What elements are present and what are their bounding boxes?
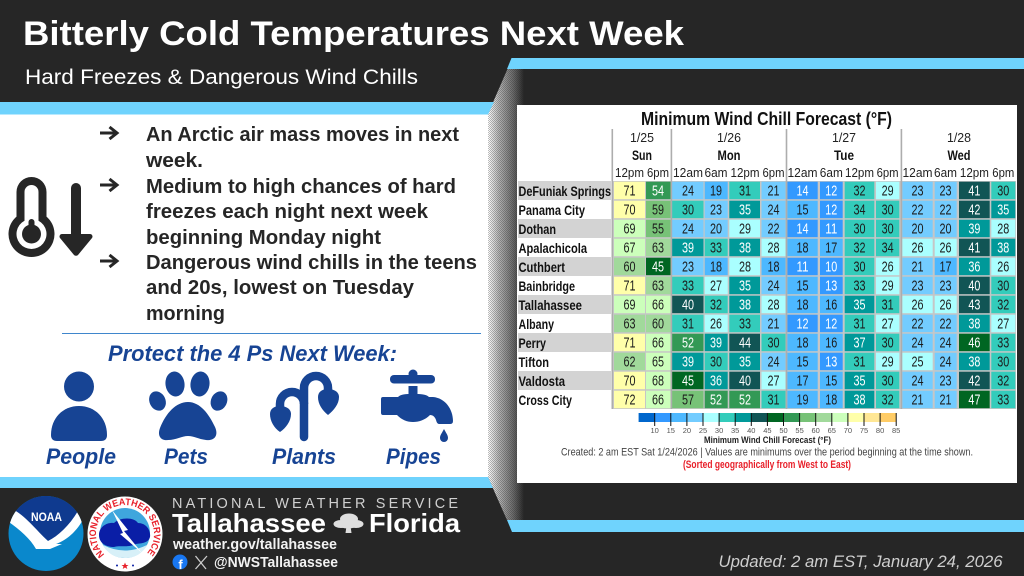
row: Panama City: 22 — [940, 202, 952, 218]
date and day headers: 1/26 — [717, 130, 741, 145]
legend: colour bar: 80 — [876, 426, 884, 435]
row: Cross City: 31 — [768, 393, 780, 409]
legend: colour bar: 15 — [667, 426, 675, 435]
row: Valdosta: 30 — [882, 374, 894, 390]
legend: colour bar: 35 — [731, 426, 739, 435]
label: people: People — [46, 444, 116, 469]
row: Cuthbert: 10 — [825, 260, 837, 276]
bullet text 1 — [145, 124, 459, 172]
row: DeFuniak Springs: 21 — [768, 183, 780, 199]
row: Bainbridge: 40 — [968, 279, 980, 295]
row: Dothan: 22 — [768, 221, 780, 237]
row: Tallahassee: 66 — [652, 298, 664, 314]
row: Tifton: 62 — [624, 355, 636, 371]
row: Panama City: 35 — [739, 202, 751, 218]
row: Apalachicola: 28 — [768, 240, 780, 256]
row: Apalachicola: 39 — [682, 240, 694, 256]
row: Cuthbert: 30 — [854, 260, 866, 276]
row: Cuthbert: 60 — [624, 260, 636, 276]
station names: Albany — [518, 317, 554, 332]
row: Perry: 33 — [997, 336, 1009, 352]
row: Dothan: 30 — [882, 221, 894, 237]
row: Panama City: 24 — [768, 202, 780, 218]
station names: Apalachicola — [518, 241, 587, 256]
legend: colour bar — [639, 413, 900, 435]
row: Dothan: 20 — [912, 221, 924, 237]
row: Panama City: 30 — [882, 202, 894, 218]
row: Bainbridge: 71 — [624, 279, 636, 295]
row: Perry — [614, 334, 1015, 352]
row: Dothan: 20 — [940, 221, 952, 237]
row: Albany: 22 — [912, 317, 924, 333]
row: Perry: 71 — [624, 336, 636, 352]
panel: wind chill chart — [517, 105, 1017, 483]
date and day headers: 1/25 — [630, 130, 654, 145]
footer: social handle: @NWSTallahassee — [214, 555, 338, 571]
row: Cuthbert: 23 — [682, 260, 694, 276]
row: Tallahassee: 38 — [739, 298, 751, 314]
row: DeFuniak Springs: 19 — [710, 183, 722, 199]
station names: Panama City — [518, 203, 585, 218]
row: Albany: 60 — [652, 317, 664, 333]
row: DeFuniak Springs: 23 — [912, 183, 924, 199]
row: Bainbridge: 23 — [940, 279, 952, 295]
icon: pipes — [381, 370, 453, 442]
row: Valdosta: 32 — [997, 374, 1009, 390]
updated timestamp: Updated: 2 am EST, January 24, 2026 — [718, 553, 1003, 571]
date and day headers: Tue — [834, 148, 854, 163]
sort note: (Sorted geographically from West to East) — [683, 459, 851, 471]
row: Apalachicola: 17 — [825, 240, 837, 256]
row: Tallahassee: 32 — [997, 298, 1009, 314]
row: Tallahassee: 43 — [968, 298, 980, 314]
row: Apalachicola: 34 — [882, 240, 894, 256]
row: DeFuniak Springs: 32 — [854, 183, 866, 199]
row: Bainbridge: 29 — [882, 279, 894, 295]
row: Panama City: 30 — [682, 202, 694, 218]
row: Tifton: 15 — [796, 355, 808, 371]
row: Tallahassee: 40 — [682, 298, 694, 314]
bullet text 3 — [146, 252, 477, 325]
row: Dothan: 14 — [796, 221, 808, 237]
accent band: under header — [0, 102, 494, 114]
row: Dothan — [614, 220, 1015, 238]
footer: website: weather.gov/tallahassee — [172, 537, 337, 553]
row: Tifton: 30 — [997, 355, 1009, 371]
row: Panama City: 35 — [997, 202, 1009, 218]
row: Panama City: 34 — [854, 202, 866, 218]
row: Cuthbert: 36 — [968, 260, 980, 276]
time headers: 6pm — [992, 165, 1014, 180]
station names: Cross City — [518, 393, 572, 408]
legend: colour bar: 70 — [844, 426, 852, 435]
row: Tallahassee: 26 — [912, 298, 924, 314]
chart title: Minimum Wind Chill Forecast (°F) — [641, 108, 892, 129]
row: Perry: 18 — [796, 336, 808, 352]
row: Panama City: 59 — [652, 202, 664, 218]
row: DeFuniak Springs: 24 — [682, 183, 694, 199]
row: Dothan: 30 — [854, 221, 866, 237]
icon: facebook — [172, 554, 188, 572]
row: Valdosta: 24 — [912, 374, 924, 390]
row: Perry: 66 — [652, 336, 664, 352]
legend: colour bar: 30 — [715, 426, 723, 435]
row: Valdosta: 45 — [682, 374, 694, 390]
row: Perry: 16 — [825, 336, 837, 352]
legend: colour bar: 75 — [860, 426, 868, 435]
bullet text 1: An Arctic air mass moves in next — [146, 124, 459, 146]
row: Dothan: 28 — [997, 221, 1009, 237]
icon: pets — [146, 370, 230, 440]
date and day headers: 1/28 — [947, 130, 971, 145]
logo: NOAA: NOAA — [31, 512, 62, 524]
time headers: 12am — [902, 165, 932, 180]
row: Tifton: 65 — [652, 355, 664, 371]
label: pets: Pets — [164, 444, 208, 469]
row: Apalachicola: 32 — [854, 240, 866, 256]
row: DeFuniak Springs: 54 — [652, 183, 664, 199]
row: DeFuniak Springs: 29 — [882, 183, 894, 199]
row: Bainbridge: 24 — [768, 279, 780, 295]
row: Cuthbert: 21 — [912, 260, 924, 276]
row: Bainbridge: 33 — [854, 279, 866, 295]
station names — [518, 184, 611, 408]
row: Cuthbert: 26 — [882, 260, 894, 276]
legend: colour bar: 20 — [683, 426, 691, 435]
row: Apalachicola: 18 — [796, 240, 808, 256]
bullet text 2: freezes each night next week — [146, 201, 429, 223]
row: Apalachicola: 26 — [912, 240, 924, 256]
row: Tallahassee: 32 — [710, 298, 722, 314]
time headers: 6am — [934, 165, 957, 180]
row: Albany: 31 — [682, 317, 694, 333]
row: Tallahassee: 31 — [882, 298, 894, 314]
date and day headers: Wed — [948, 148, 970, 163]
row: DeFuniak Springs — [614, 182, 1015, 200]
time headers: 12pm — [845, 165, 874, 180]
row: Cuthbert: 17 — [940, 260, 952, 276]
row: Dothan: 24 — [682, 221, 694, 237]
station names: Dothan — [518, 222, 556, 237]
bullet arrow 2 — [100, 179, 117, 191]
station names: Tifton — [518, 355, 549, 370]
row: Cuthbert: 18 — [710, 260, 722, 276]
date and day headers — [630, 130, 971, 163]
row: Panama City: 70 — [624, 202, 636, 218]
legend: colour bar: 45 — [763, 426, 772, 435]
row: Albany: 22 — [940, 317, 952, 333]
row: Cross City: 52 — [739, 393, 751, 409]
heading: protect the 4 Ps: Protect the 4 Ps Next Week: — [108, 341, 397, 366]
row: Cuthbert: 11 — [796, 260, 808, 276]
row: Tifton: 24 — [768, 355, 780, 371]
station names: Bainbridge — [518, 279, 575, 294]
row: Valdosta: 40 — [739, 374, 751, 390]
row: Cross City: 38 — [854, 393, 866, 409]
legend: colour bar: 60 — [812, 426, 820, 435]
row: Cross City — [614, 391, 1015, 408]
row: Valdosta: 23 — [940, 374, 952, 390]
row: Cross City: 72 — [624, 393, 636, 409]
legend: colour bar: 50 — [779, 426, 788, 435]
row: Panama City: 22 — [912, 202, 924, 218]
row: Bainbridge: 33 — [682, 279, 694, 295]
row: Perry: 30 — [882, 336, 894, 352]
row: Cross City: 21 — [940, 393, 952, 409]
row: Perry: 24 — [940, 336, 952, 352]
time headers: 12am — [788, 165, 818, 180]
row: DeFuniak Springs: 31 — [739, 183, 751, 199]
row: Apalachicola: 33 — [710, 240, 722, 256]
row: Cuthbert: 18 — [768, 260, 780, 276]
row: Cross City: 47 — [968, 393, 980, 409]
row: Panama City: 42 — [968, 202, 980, 218]
bullet arrow 1 — [100, 127, 117, 139]
table background — [612, 181, 1016, 409]
row: Bainbridge: 35 — [739, 279, 751, 295]
time headers: 12pm — [730, 165, 760, 180]
icon: facebook: f — [178, 557, 183, 572]
row: Apalachicola: 26 — [940, 240, 952, 256]
station names: Tallahassee — [518, 298, 582, 313]
row: Tifton: 13 — [825, 355, 837, 371]
row: Valdosta: 42 — [968, 374, 980, 390]
icon: thermometer — [9, 177, 55, 257]
row: Apalachicola: 41 — [968, 240, 980, 256]
row: Cross City: 33 — [997, 393, 1009, 409]
label: plants: Plants — [272, 444, 336, 469]
row: Dothan: 11 — [825, 221, 837, 237]
bullet text 1: week. — [145, 150, 203, 172]
time headers: 6pm — [647, 165, 669, 180]
row: Apalachicola: 38 — [997, 240, 1009, 256]
row: Apalachicola — [614, 239, 1015, 256]
bullet text 3: Dangerous wind chills in the teens — [146, 252, 477, 274]
bullet text 3: and 20s, lowest on Tuesday — [146, 277, 415, 299]
logo: National Weather Service: NATIONAL WEATHER SERVICE — [89, 498, 161, 558]
row: Cuthbert — [614, 258, 1015, 276]
row: Valdosta: 70 — [624, 374, 636, 390]
row: Tifton — [614, 353, 1015, 370]
icon: X — [196, 556, 207, 569]
legend title: Minimum Wind Chill Forecast (°F) — [704, 435, 831, 445]
row: Valdosta: 35 — [854, 374, 866, 390]
row: Cross City: 57 — [682, 393, 694, 409]
date and day headers: Mon — [718, 148, 740, 163]
row: Apalachicola: 38 — [739, 240, 751, 256]
bullet arrow 3 — [100, 255, 117, 267]
row: Tallahassee: 69 — [624, 298, 636, 314]
row: Tifton: 24 — [940, 355, 952, 371]
icon: down arrow — [60, 183, 92, 256]
row: Albany: 21 — [768, 317, 780, 333]
legend: colour bar: 25 — [699, 426, 707, 435]
row: Cross City: 18 — [825, 393, 837, 409]
row: Cross City: 19 — [796, 393, 808, 409]
row: Cross City: 52 — [710, 393, 722, 409]
row: DeFuniak Springs: 41 — [968, 183, 980, 199]
row: Tifton: 39 — [682, 355, 694, 371]
row: Panama City — [614, 201, 1015, 218]
bullet text 2: Medium to high chances of hard — [146, 176, 456, 198]
row: Perry: 24 — [912, 336, 924, 352]
row: Valdosta: 68 — [652, 374, 664, 390]
panel: left white content area — [0, 114, 489, 477]
row: Albany: 33 — [739, 317, 751, 333]
row: Albany — [614, 315, 1015, 332]
bullet text 2: beginning Monday night — [146, 227, 381, 249]
time headers: 12pm — [960, 165, 989, 180]
legend: colour bar: 85 — [892, 426, 900, 435]
row: Cross City: 66 — [652, 393, 664, 409]
row: Bainbridge: 27 — [710, 279, 722, 295]
row: Panama City: 15 — [796, 202, 808, 218]
row: Valdosta: 17 — [796, 374, 808, 390]
row: Albany: 26 — [710, 317, 722, 333]
time headers: 6pm — [877, 165, 899, 180]
row: Valdosta — [614, 372, 1015, 390]
row: Tallahassee: 18 — [796, 298, 808, 314]
row: Bainbridge: 15 — [796, 279, 808, 295]
footer: Florida: Florida — [369, 508, 461, 538]
subtitle: Hard Freezes & Dangerous Wind Chills — [25, 66, 418, 89]
station names: DeFuniak Springs — [518, 184, 611, 199]
row: Dothan: 29 — [739, 221, 751, 237]
row: Apalachicola: 63 — [652, 240, 664, 256]
panel: faded slanted divider — [488, 69, 526, 520]
row: Valdosta: 27 — [768, 374, 780, 390]
legend: colour bar: 55 — [795, 426, 804, 435]
station name bands — [518, 181, 611, 390]
time headers: 12pm — [615, 165, 644, 180]
row: Albany: 38 — [968, 317, 980, 333]
footer: Tallahassee: Tallahassee — [172, 508, 326, 538]
row: Dothan: 55 — [652, 221, 664, 237]
row: Valdosta: 36 — [710, 374, 722, 390]
station names: Cuthbert — [518, 260, 565, 275]
row: Bainbridge — [614, 277, 1015, 294]
row: Tallahassee: 26 — [940, 298, 952, 314]
row: Bainbridge: 30 — [997, 279, 1009, 295]
row: Tifton: 30 — [710, 355, 722, 371]
icon: plants — [270, 376, 339, 437]
legend: colour bar: 10 — [651, 426, 659, 435]
row: Apalachicola: 67 — [624, 240, 636, 256]
date and day headers: Sun — [632, 148, 652, 163]
row: Albany: 27 — [997, 317, 1009, 333]
row: Bainbridge: 63 — [652, 279, 664, 295]
row: Tallahassee: 16 — [825, 298, 837, 314]
station names: Perry — [518, 336, 546, 351]
icon: oak tree — [334, 514, 364, 533]
row: DeFuniak Springs: 23 — [940, 183, 952, 199]
row: Cuthbert: 45 — [652, 260, 664, 276]
row: Albany: 12 — [825, 317, 837, 333]
accent band: above footer — [0, 477, 493, 488]
row: Tallahassee — [614, 296, 1015, 314]
row: Tallahassee: 35 — [854, 298, 866, 314]
row: Perry: 39 — [710, 336, 722, 352]
time headers: 6am — [820, 165, 843, 180]
row: Panama City: 12 — [825, 202, 837, 218]
row: Tifton: 38 — [968, 355, 980, 371]
row: DeFuniak Springs: 71 — [624, 183, 636, 199]
station names: Valdosta — [518, 374, 565, 389]
row: Tallahassee: 28 — [768, 298, 780, 314]
bullet text 2 — [146, 176, 456, 249]
row: Bainbridge: 13 — [825, 279, 837, 295]
row: DeFuniak Springs: 12 — [825, 183, 837, 199]
row: Dothan: 69 — [624, 221, 636, 237]
time headers: 6am — [704, 165, 728, 180]
accent band: bottom right — [507, 520, 1024, 532]
row: Cross City: 32 — [882, 393, 894, 409]
row: Perry: 46 — [968, 336, 980, 352]
icon: people — [51, 372, 107, 441]
row: Albany: 27 — [882, 317, 894, 333]
row: Tifton: 25 — [912, 355, 924, 371]
row: DeFuniak Springs: 30 — [997, 183, 1009, 199]
row: Perry: 30 — [768, 336, 780, 352]
title: Bitterly Cold Temperatures Next Week — [23, 15, 684, 53]
row: Albany: 63 — [624, 317, 636, 333]
date and day headers: 1/27 — [832, 130, 856, 145]
row: Cuthbert: 28 — [739, 260, 751, 276]
row: Dothan: 20 — [710, 221, 722, 237]
row: Perry: 52 — [682, 336, 694, 352]
time headers: 12am — [673, 165, 703, 180]
row: Bainbridge: 23 — [912, 279, 924, 295]
row: Cuthbert: 26 — [997, 260, 1009, 276]
row: Tifton: 29 — [882, 355, 894, 371]
row: Cross City: 21 — [912, 393, 924, 409]
row: DeFuniak Springs: 14 — [796, 183, 808, 199]
row: Albany: 12 — [796, 317, 808, 333]
label: pipes: Pipes — [386, 444, 441, 469]
footer: National Weather Service: NATIONAL WEATHER SERVICE — [172, 496, 458, 512]
logo: NOAA — [8, 496, 84, 571]
row: Albany: 31 — [854, 317, 866, 333]
row: Dothan: 39 — [968, 221, 980, 237]
accent band: top right — [507, 58, 1024, 69]
legend: colour bar: 65 — [828, 426, 836, 435]
row: Tifton: 35 — [739, 355, 751, 371]
time headers: 6pm — [762, 165, 784, 180]
bullet text 3: morning — [146, 303, 225, 325]
row: Tifton: 31 — [854, 355, 866, 371]
row: Perry: 44 — [739, 336, 751, 352]
row: Perry: 37 — [854, 336, 866, 352]
legend: colour bar: 40 — [747, 426, 755, 435]
row: Valdosta: 15 — [825, 374, 837, 390]
row: Panama City: 23 — [710, 202, 722, 218]
time headers — [615, 165, 1014, 180]
